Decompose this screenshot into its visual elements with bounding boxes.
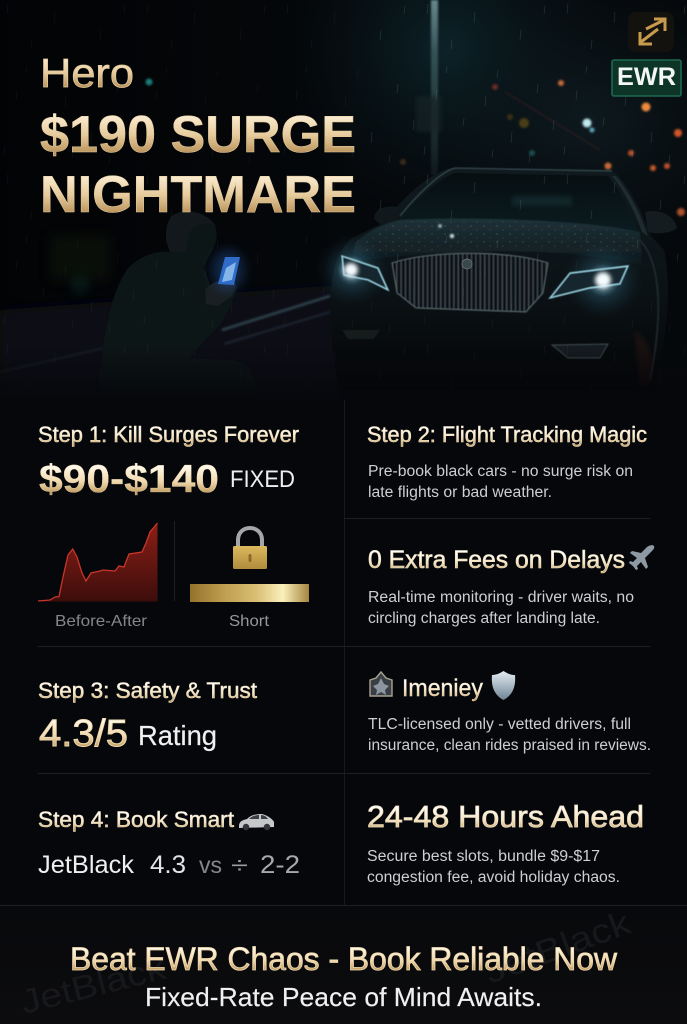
price: FIXED (230, 466, 295, 493)
panel: 24-48 hours (367, 799, 644, 886)
grille (392, 253, 548, 312)
text: TLC (368, 716, 651, 754)
bokeh city lights (146, 78, 685, 216)
person looking at phone (100, 211, 258, 400)
hero title: NIGHTMARE (40, 166, 356, 224)
comparison row (38, 851, 300, 879)
chart: before-after surge area (38, 523, 158, 630)
rating: 4.3/5 (39, 713, 128, 755)
person silhouette (100, 211, 258, 400)
text: real-time monitoring: circling charges after landing late. (368, 610, 600, 627)
watermarks (17, 903, 637, 1022)
call to action: Fixed-Rate Peace of Mind Awaits. (145, 982, 542, 1012)
comparison row: 4.3 (150, 851, 186, 879)
icon: gold padlock (233, 528, 267, 569)
heading: step 1: Step 1: Kill Surges Forever (38, 422, 299, 447)
side window (612, 176, 648, 236)
icon: car (239, 814, 274, 830)
left headlight (316, 234, 388, 306)
EWR road sign: EWR (617, 63, 676, 91)
icon: shield (492, 671, 515, 700)
heading: zero fees: 0 Extra Fees on Delays (368, 546, 625, 574)
text: TLC: TLC-licensed only - vetted drivers, full (368, 716, 631, 733)
content panel base (0, 400, 687, 1024)
phone (212, 250, 244, 290)
car (316, 168, 677, 390)
rain overlay (0, 0, 687, 400)
text: pre-book: late flights or bad weather. (368, 484, 552, 501)
comparison row: 2-2 (260, 851, 300, 879)
hero title: $190 SURGE (40, 106, 356, 164)
comparison row: vs (199, 852, 222, 878)
street pole (416, 0, 442, 175)
hero title (40, 50, 356, 224)
hero photo: rainy night scene (0, 0, 687, 400)
watermarks: JetBlack (17, 949, 171, 1022)
panel: step 1 (38, 422, 309, 630)
comparison row: ÷ (231, 852, 248, 878)
text: secure slots: congestion fee, avoid holiday chaos. (367, 869, 620, 886)
icon: gold double arrow (628, 12, 674, 52)
text: pre-book: Pre-book black cars - no surge risk on (368, 463, 633, 480)
rating: Rating (138, 720, 217, 751)
text: secure slots (367, 848, 620, 886)
street surface (0, 285, 340, 400)
heading: step 2: Step 2: Flight Tracking Magic (367, 422, 647, 447)
comparison row: JetBlack (38, 851, 135, 879)
panel: step 3 (38, 678, 257, 755)
watermarks: JetBlack (480, 903, 637, 992)
text: pre-book (368, 463, 633, 501)
hero fade into content (0, 345, 687, 402)
heading: trust: Imeniey (402, 675, 483, 702)
call to action: Beat EWR Chaos - Book Reliable Now (70, 941, 618, 977)
hood (352, 218, 642, 266)
EWR road sign (612, 60, 681, 96)
chart: before-after surge area: Before-After (55, 613, 148, 630)
panel: step 4 (38, 807, 300, 879)
fixed price gold bar (190, 584, 309, 630)
dividers (0, 400, 687, 906)
bottom CTA band (0, 906, 687, 1024)
right headlight (550, 240, 643, 320)
car body (331, 168, 668, 390)
text: secure slots: Secure best slots, bundle $9-$17 (367, 848, 600, 865)
text: real-time monitoring: Real-time monitoring - driver waits, no (368, 589, 634, 606)
side mirrors (374, 206, 398, 224)
roof edge highlight (400, 168, 612, 216)
rating (39, 713, 217, 755)
hero title: Hero (40, 50, 134, 96)
icon: airplane (629, 545, 654, 570)
wet road reflections (0, 296, 330, 372)
text: TLC: insurance, clean rides praised in reviews. (368, 737, 651, 754)
fixed price gold bar: Short (229, 613, 270, 630)
price (39, 458, 295, 501)
lower bumper (342, 330, 380, 339)
heading: step 4: Step 4: Book Smart (38, 807, 234, 832)
heading: 24-48 hours: 24-48 Hours Ahead (367, 799, 644, 834)
call to action (70, 941, 618, 1012)
heading: step 3: Step 3: Safety & Trust (38, 678, 257, 703)
panel: zero extra fees (368, 545, 654, 627)
price: $90-$140 (39, 458, 219, 501)
text: real-time monitoring (368, 589, 634, 627)
windshield (400, 173, 638, 232)
panel: trust (368, 671, 651, 754)
icon: badge star (370, 672, 392, 696)
panel: step 2 (367, 422, 647, 501)
